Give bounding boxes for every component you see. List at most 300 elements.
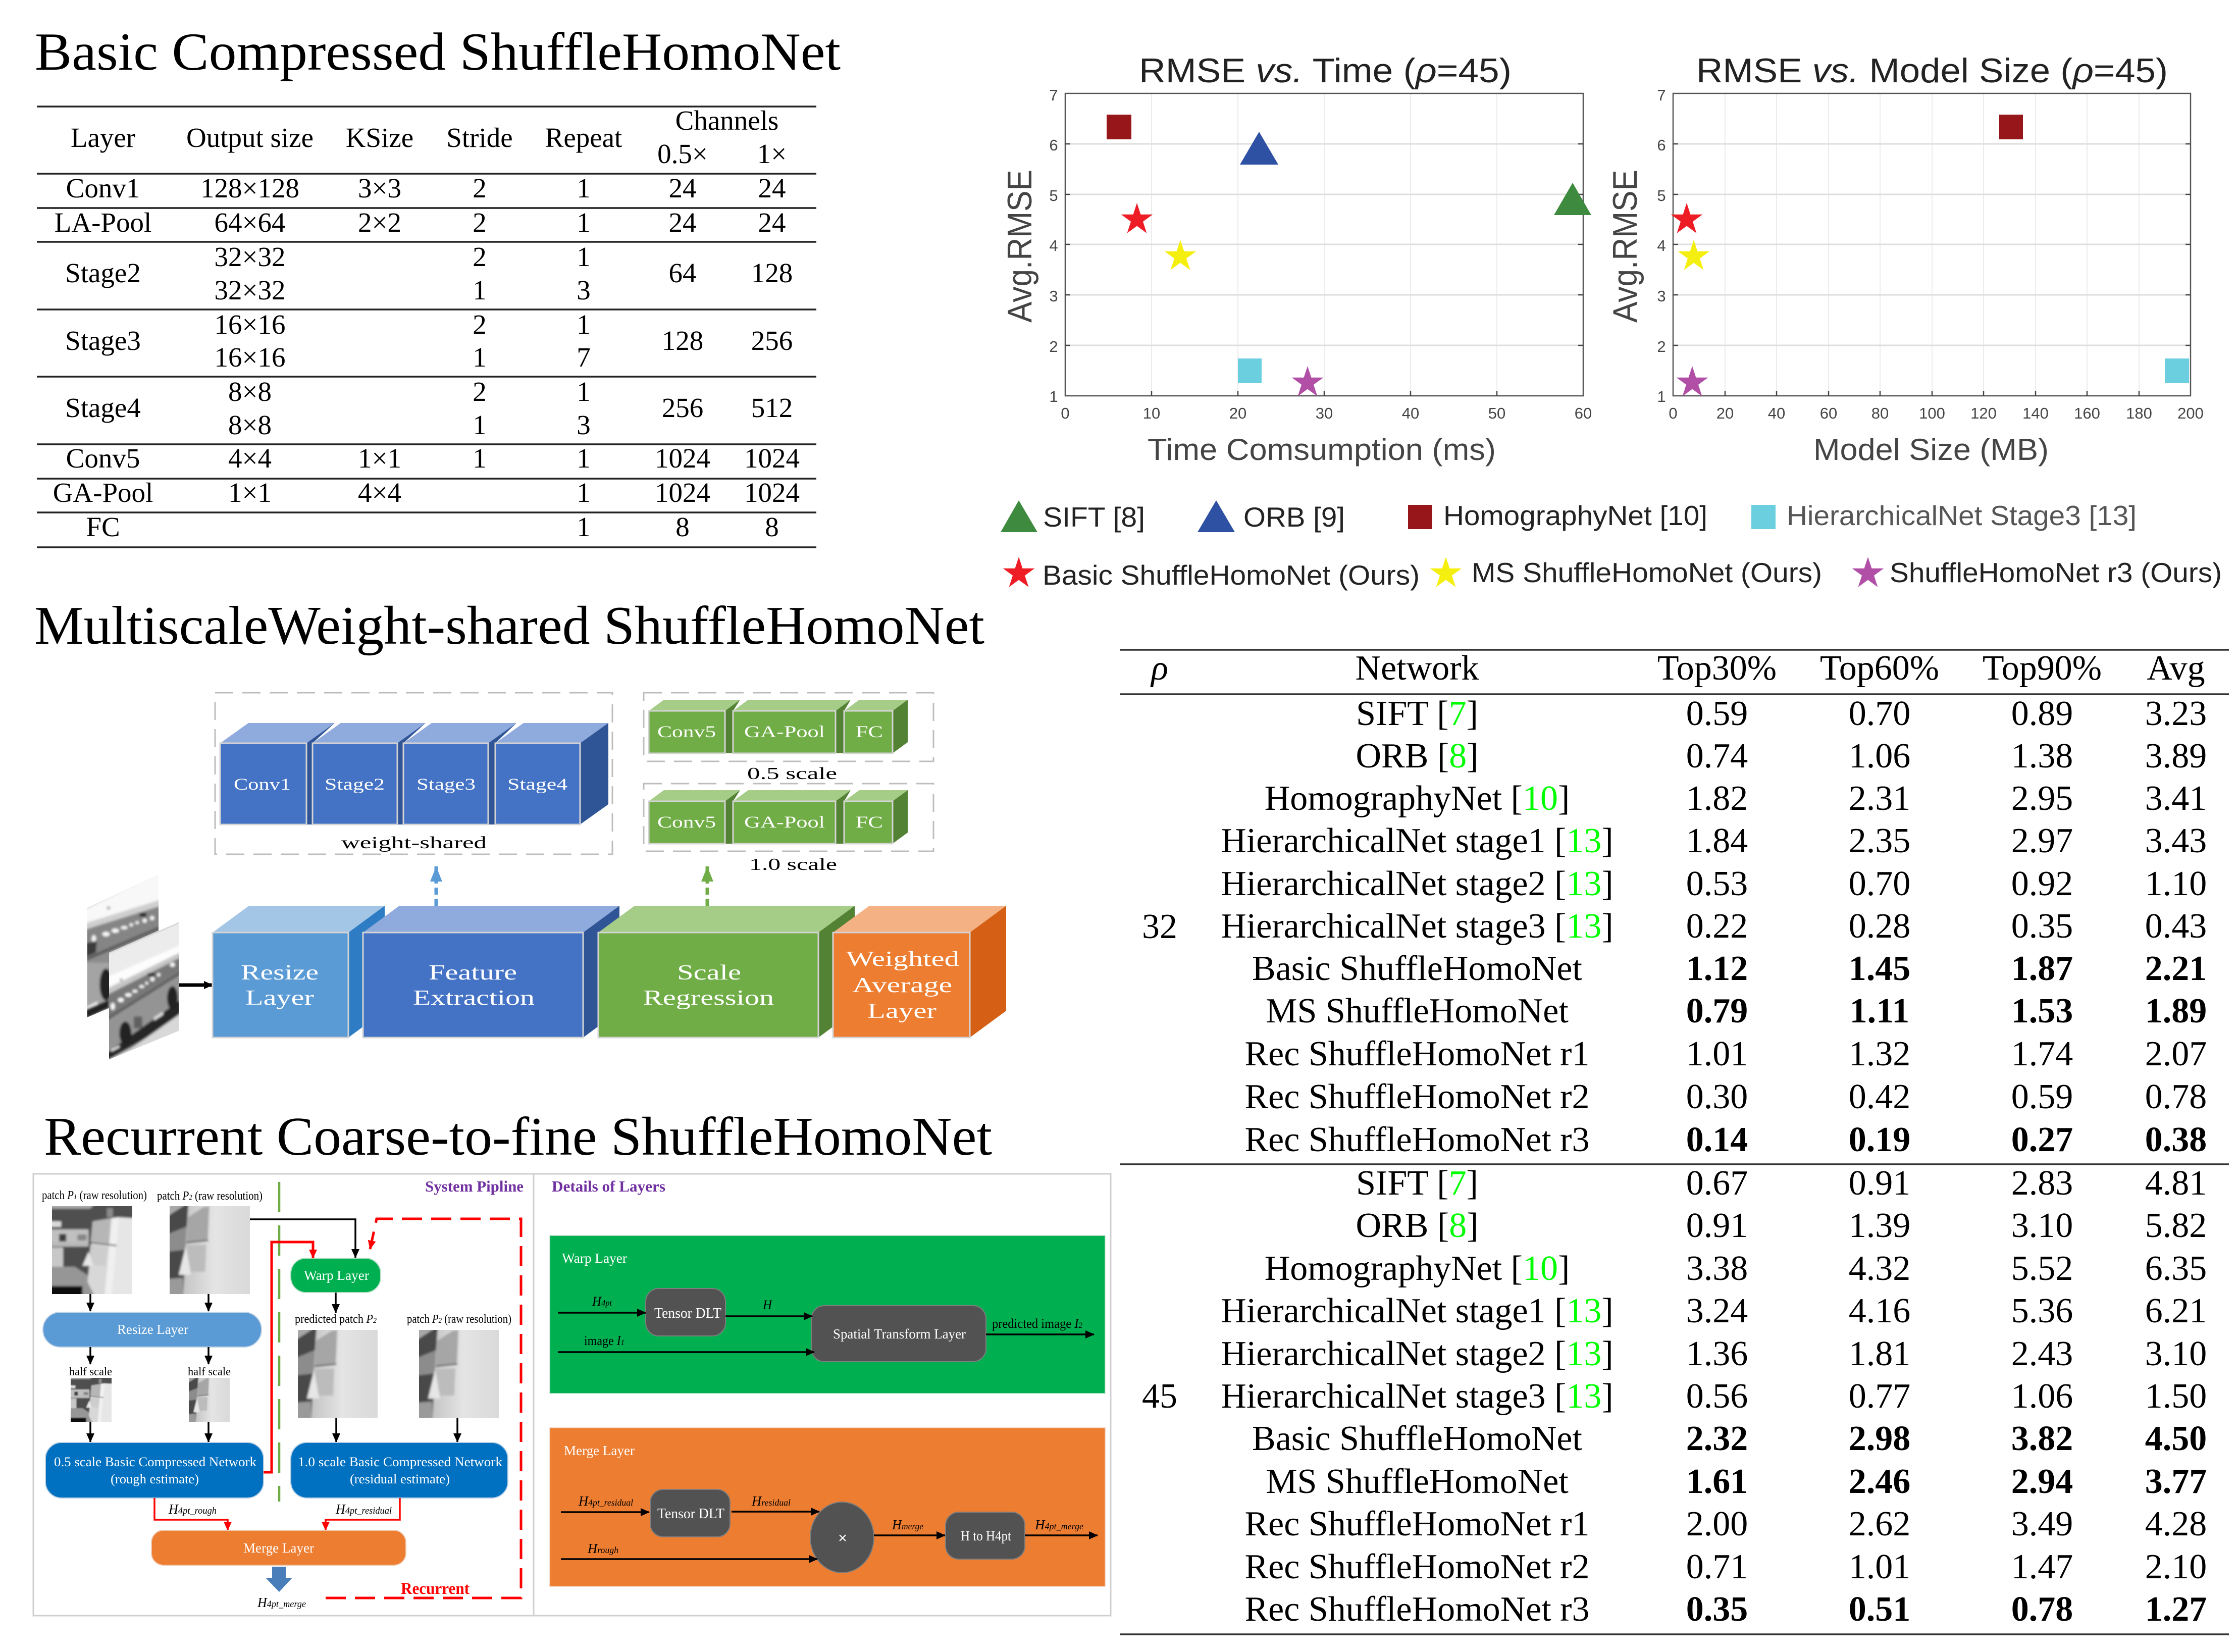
rho group 32 rows: 0.38	[2145, 1120, 2207, 1159]
row: 1.0 scale blocks: Conv5	[657, 813, 716, 832]
rho group 32 rows: HierarchicalNet stage1 [13]	[1221, 821, 1614, 860]
table: basic network layers: Output size	[186, 122, 314, 153]
arrow: blue dashed up	[434, 866, 438, 906]
rho group 45 rows: 2.46	[1849, 1462, 1910, 1501]
rho group 45 rows: 3.10	[2011, 1206, 2073, 1245]
table: basic network layers: 2	[473, 173, 487, 203]
rho group 45 rows: 3.24	[1686, 1292, 1748, 1330]
panel: merge layer detail	[550, 1428, 1105, 1586]
arrow: recurrent loop	[326, 1219, 521, 1598]
x axis ticks: 30	[1316, 404, 1333, 422]
table: basic network layers: 1	[577, 241, 591, 272]
arrows and labels: merge flow	[561, 1493, 1098, 1559]
row: 0.5 scale blocks: Conv5	[657, 723, 716, 741]
block: Conv1	[220, 723, 335, 824]
data markers	[1107, 115, 1591, 396]
arrows and labels: warp flow	[558, 1294, 1094, 1352]
chart title: RMSE vs time: RMSE vs. Time (ρ=45)	[1139, 51, 1512, 90]
y axis ticks: 5	[1657, 187, 1666, 204]
arrow: output down	[266, 1567, 292, 1592]
label: half scale right: half scale	[188, 1365, 231, 1378]
arrows and labels: warp flow: image I1	[584, 1333, 624, 1348]
rho group 32 rows: 3.41	[2145, 779, 2207, 818]
block: tensor DLT: Tensor DLT	[657, 1506, 724, 1522]
panel: weight-shared dashed box	[215, 693, 612, 854]
rho group 45 rows: HierarchicalNet stage3 [13]	[1221, 1377, 1614, 1416]
rho group 45 rows: 3.38	[1686, 1249, 1748, 1288]
rho group 32 rows: 1.45	[1849, 949, 1910, 988]
x axis ticks: 140	[2022, 404, 2049, 422]
table: basic network layers: 2	[473, 207, 487, 238]
rho group 45 rows: 1.61	[1686, 1462, 1748, 1501]
rho group 45 rows: 4.50	[2145, 1419, 2207, 1458]
x axis ticks: 20	[1229, 404, 1246, 422]
y axis ticks: 6	[1657, 136, 1666, 154]
block: Weighted Average Layer: Layer	[867, 1000, 936, 1023]
label: 0.5 scale: 0.5 scale	[747, 764, 837, 783]
rho group 32 rows: 0.59	[2011, 1077, 2073, 1116]
y axis ticks: 2	[1049, 338, 1058, 355]
rho group 32 rows: 3.23	[2145, 694, 2207, 733]
title: multiscale network: MultiscaleWeight-shared ShuffleHomoNet	[34, 596, 984, 656]
table: basic network layers: 1	[473, 275, 487, 305]
y axis ticks: 7	[1657, 86, 1666, 104]
table: basic network layers: 128	[751, 257, 793, 288]
rho group 45 rows: Rec ShuffleHomoNet r3	[1244, 1590, 1590, 1629]
rho group 45 rows: 1.01	[1849, 1547, 1910, 1586]
rho group 32 rows: HierarchicalNet stage2 [13]	[1221, 864, 1614, 903]
rho group 32 rows: 0.43	[2145, 907, 2207, 946]
rho group 32 rows	[1142, 694, 2207, 1159]
rho group 45 rows: 2.32	[1686, 1419, 1748, 1458]
table header: ρ	[1150, 649, 1168, 688]
title: recurrent network: Recurrent Coarse-to-fine ShuffleHomoNet	[44, 1107, 992, 1167]
block: Scale Regression	[598, 906, 855, 1038]
block: Stage2: Stage2	[325, 776, 385, 794]
block: Stage4	[495, 723, 608, 824]
rho group 32 rows: 0.59	[1686, 694, 1748, 733]
x axis ticks: 20	[1716, 404, 1734, 422]
table: basic network layers: 4×4	[358, 477, 401, 508]
label: merge layer: Merge Layer	[564, 1443, 635, 1458]
y axis ticks: 4	[1049, 237, 1058, 254]
legend: SIFT [8]	[1043, 501, 1145, 533]
panel: 0.5 scale dashed box	[644, 693, 933, 761]
table: basic network layers: 3	[577, 409, 591, 440]
rho group 32 rows: 1.82	[1686, 779, 1748, 818]
rho group 45 rows: 4.32	[1849, 1249, 1910, 1288]
table: basic network layers: 16×16	[214, 342, 286, 373]
block: H to H4pt: H to H4pt	[961, 1528, 1011, 1543]
x axis ticks	[1669, 404, 2204, 422]
chart: RMSE vs time	[1001, 51, 1592, 467]
rho group 32 rows: 1.87	[2011, 949, 2073, 988]
rho group 45 rows: 5.82	[2145, 1206, 2207, 1245]
label: recurrent: Recurrent	[401, 1580, 470, 1598]
block: merge layer: Merge Layer	[243, 1540, 314, 1556]
arrow: P2 to warp	[250, 1219, 355, 1258]
rho group 32 rows: 3.89	[2145, 737, 2207, 776]
label: predicted patch: predicted patch P2	[295, 1313, 377, 1326]
block: Stage2	[313, 723, 426, 824]
row: 0.5 scale blocks: FC	[856, 723, 883, 741]
rho group 45 rows: 3.77	[2145, 1462, 2207, 1501]
label: patch P1: patch P1 (raw resolution)	[42, 1189, 147, 1202]
rho group 32 rows: 0.30	[1686, 1077, 1748, 1116]
table: basic network layers: 1	[577, 207, 591, 238]
block: 0.5 scale network	[45, 1442, 264, 1498]
table: basic network layers: 1024	[655, 443, 710, 474]
x axis ticks: 0	[1669, 404, 1678, 422]
x axis ticks: 120	[1970, 404, 1997, 422]
y axis ticks: 6	[1049, 136, 1058, 154]
table: basic network layers: Conv5	[66, 443, 140, 474]
rho group 45 rows: 3.49	[2011, 1505, 2073, 1543]
table: basic network layers: 128	[662, 325, 703, 356]
rho group 32 rows: 1.12	[1686, 949, 1748, 988]
row: 1.0 scale blocks: FC	[856, 813, 883, 832]
rho group 32 rows: Rec ShuffleHomoNet r2	[1244, 1077, 1590, 1116]
rho group 45 rows: 45	[1142, 1377, 1177, 1416]
table: basic network layers: Stride	[446, 122, 513, 153]
rho group 32 rows: 1.89	[2145, 992, 2207, 1030]
rho group 45 rows: 1.39	[1849, 1206, 1910, 1245]
rho group 32 rows: 2.95	[2011, 779, 2073, 818]
table: basic network layers: 24	[668, 207, 697, 238]
block: tensor DLT	[650, 1489, 730, 1537]
arrows and labels: warp flow: H	[762, 1298, 772, 1312]
image: predicted patch	[288, 1320, 389, 1428]
x axis ticks: 100	[1919, 404, 1945, 422]
table: basic network layers: 3	[577, 275, 591, 305]
block: 0.5 scale network: (rough estimate)	[111, 1472, 199, 1486]
rho group 45 rows: 4.16	[1849, 1292, 1910, 1330]
table: basic network layers: 32×32	[214, 241, 286, 272]
block: spatial transform layer	[811, 1306, 986, 1362]
arrows and labels: merge flow: Hrough	[587, 1541, 618, 1556]
table: basic network layers: 24	[758, 173, 786, 203]
label: weight-shared: weight-shared	[341, 834, 487, 852]
table header: Avg	[2147, 649, 2205, 688]
block: multiply circle	[810, 1502, 874, 1573]
rho group 32 rows: 0.19	[1849, 1120, 1910, 1159]
x axis ticks: 0	[1061, 404, 1070, 422]
table: basic network layers: Layer	[71, 122, 135, 153]
data markers	[1671, 115, 2189, 396]
x axis ticks: 40	[1402, 404, 1419, 422]
block: Feature Extraction: Feature	[429, 961, 517, 985]
x axis label: Model Size (MB)	[1813, 433, 2049, 467]
block: warp layer	[291, 1258, 381, 1293]
rho group 45 rows: Rec ShuffleHomoNet r2	[1244, 1547, 1590, 1586]
rho group 32 rows: 3.43	[2145, 821, 2207, 860]
block: warp layer: Warp Layer	[304, 1268, 369, 1283]
block: Resize Layer: Layer	[245, 987, 314, 1010]
x axis ticks: 200	[2177, 404, 2204, 422]
block: merge layer	[151, 1530, 406, 1565]
label: warp layer: Warp Layer	[562, 1251, 627, 1266]
rho group 45 rows: 0.35	[1686, 1590, 1748, 1629]
panel: recurrent network figure	[33, 1174, 1111, 1616]
rho group 32 rows: 1.10	[2145, 864, 2207, 903]
arrow: warp to predicted	[335, 1293, 337, 1313]
rho group 32 rows: HierarchicalNet stage3 [13]	[1221, 907, 1614, 946]
table: basic network layers: 2	[473, 309, 487, 340]
row: 0.5 scale blocks	[649, 700, 908, 753]
rho group 45 rows: 0.51	[1849, 1590, 1910, 1629]
y axis ticks	[1657, 86, 1666, 405]
table header: Top30%	[1657, 649, 1777, 688]
rho group 45 rows: 1.81	[1849, 1334, 1910, 1373]
table: basic network layers: 1	[577, 477, 591, 508]
y axis label: Avg.RMSE	[1001, 170, 1039, 323]
rho group 45 rows: 4.28	[2145, 1505, 2207, 1543]
rho group 45 rows: 2.62	[1849, 1505, 1910, 1543]
y axis label: Avg.RMSE	[1606, 170, 1644, 323]
rho group 45 rows: MS ShuffleHomoNet	[1266, 1462, 1569, 1501]
rho group 45 rows: SIFT [7]	[1356, 1164, 1478, 1203]
table: basic network layers: 1	[473, 443, 487, 474]
table header	[1150, 649, 2205, 688]
image: patch P2	[160, 1196, 261, 1304]
arrow: green dashed up	[706, 866, 709, 906]
rho group 32 rows: 32	[1142, 907, 1177, 946]
block: spatial transform layer: Spatial Transform Layer	[833, 1326, 966, 1341]
block: Resize Layer: Resize	[241, 961, 319, 985]
rho group 32 rows: 0.78	[2145, 1077, 2207, 1116]
rho group 45 rows: Basic ShuffleHomoNet	[1252, 1419, 1582, 1458]
block: Weighted Average Layer: Weighted	[846, 948, 959, 971]
legend: ShuffleHomoNet r3 (Ours)	[1890, 557, 2222, 588]
table: basic network layers: 3×3	[358, 173, 401, 203]
arrows and labels: warp flow: H4pt	[592, 1294, 612, 1309]
table: basic network layers: 1024	[744, 443, 800, 474]
y axis ticks	[1049, 86, 1058, 405]
arrows and labels: merge flow: H4pt_residual	[578, 1493, 633, 1509]
legend: Basic ShuffleHomoNet (Ours)	[1043, 559, 1420, 591]
rho group 45 rows: 4.81	[2145, 1164, 2207, 1203]
rho group 45 rows: 1.50	[2145, 1377, 2207, 1416]
block: Stage3: Stage3	[417, 776, 476, 794]
rho group 32 rows: 0.42	[1849, 1077, 1910, 1116]
table: basic network layers: 7	[577, 342, 591, 373]
table: basic network layers: 1024	[655, 477, 710, 508]
arrows and labels: merge flow: Hresidual	[751, 1493, 791, 1509]
image: patch P1	[42, 1196, 143, 1304]
rho group 32 rows: 0.79	[1686, 992, 1748, 1030]
table: benchmark results	[1120, 649, 2229, 1634]
rho group 45 rows: 3.82	[2011, 1419, 2073, 1458]
y axis ticks: 5	[1049, 187, 1058, 204]
table: basic network layers: 1×1	[358, 443, 401, 474]
rho group 45 rows: HierarchicalNet stage1 [13]	[1221, 1292, 1614, 1330]
rho group 45 rows: 2.94	[2011, 1462, 2073, 1501]
block: Stage3	[403, 723, 516, 824]
block: Scale Regression: Scale	[677, 961, 741, 985]
table: basic network layers: 2	[473, 241, 487, 272]
arrows and labels: merge flow: H4pt_merge	[1034, 1517, 1083, 1532]
label: patch P2: patch P2 (raw resolution)	[157, 1190, 263, 1203]
block: Conv1: Conv1	[234, 776, 291, 794]
legend: MS ShuffleHomoNet (Ours)	[1472, 557, 1822, 588]
table: basic network layers: 1	[577, 173, 591, 203]
block: Weighted Average Layer	[833, 906, 1006, 1038]
rho group 45 rows: 0.56	[1686, 1377, 1748, 1416]
rho group 32 rows: 0.28	[1849, 907, 1910, 946]
table: basic network layers: 2×2	[358, 207, 401, 238]
table: basic network layers: LA-Pool	[55, 207, 151, 238]
table: basic network layers: 256	[751, 325, 793, 356]
rho group 45 rows: 2.43	[2011, 1334, 2073, 1373]
y axis ticks: 2	[1657, 338, 1666, 355]
x axis ticks: 160	[2074, 404, 2100, 422]
rho group 45 rows: 2.98	[1849, 1419, 1910, 1458]
rho group 45 rows	[1142, 1164, 2207, 1629]
block: multiply circle: ×	[838, 1530, 847, 1546]
table: basic network layers: 256	[662, 392, 703, 423]
table: basic network layers: Channels	[675, 105, 778, 136]
arrows: half scale to network	[90, 1422, 209, 1442]
rho group 45 rows: 0.78	[2011, 1590, 2073, 1629]
label: patch P2 raw: patch P2 (raw resolution)	[407, 1313, 511, 1326]
y axis ticks: 1	[1049, 388, 1058, 405]
y axis ticks: 3	[1657, 287, 1666, 305]
title: basic network: Basic Compressed ShuffleHomoNet	[35, 22, 841, 81]
arrow: residual to merge	[326, 1498, 400, 1530]
legend: HierarchicalNet Stage3 [13]	[1787, 500, 2137, 531]
table: basic network layers: 64	[668, 257, 697, 288]
block: Feature Extraction: Extraction	[413, 987, 535, 1010]
legend	[1001, 500, 2222, 591]
table: basic network layers: 1	[577, 309, 591, 340]
image: patch P2 repeated	[409, 1320, 510, 1428]
image: half scale P2	[184, 1373, 235, 1427]
rho group 32 rows: 2.35	[1849, 821, 1910, 860]
block: Stage4: Stage4	[507, 776, 567, 794]
block: 1.0 scale network	[291, 1442, 508, 1498]
rho group 32 rows: 1.74	[2011, 1035, 2073, 1073]
table: basic network layers: 0.5×	[657, 138, 708, 169]
rho group 45 rows: 1.27	[2145, 1590, 2207, 1629]
rho group 32 rows: 0.89	[2011, 694, 2073, 733]
arrows: resize to half scale	[90, 1347, 209, 1364]
rho group 32 rows: 2.31	[1849, 779, 1910, 818]
rho group 45 rows: 1.36	[1686, 1334, 1748, 1373]
rho group 32 rows: 2.07	[2145, 1035, 2207, 1073]
panel: 1.0 scale dashed box	[644, 784, 933, 851]
rho group 32 rows: 0.27	[2011, 1120, 2073, 1159]
rho group 32 rows: Rec ShuffleHomoNet r3	[1244, 1120, 1590, 1159]
rho group 32 rows: MS ShuffleHomoNet	[1266, 992, 1569, 1030]
heading: details of layers: Details of Layers	[552, 1177, 665, 1195]
x axis label: Time Comsumption (ms)	[1148, 433, 1496, 467]
rho group 45 rows: 0.91	[1686, 1206, 1748, 1245]
label: half scale left: half scale	[69, 1365, 112, 1378]
rho group 45 rows: 3.10	[2145, 1334, 2207, 1373]
block: Scale Regression: Regression	[643, 987, 774, 1010]
table: basic network layers: 24	[758, 207, 786, 238]
table: basic network layers	[37, 105, 816, 547]
rho group 45 rows: 6.21	[2145, 1292, 2207, 1330]
rho group 45 rows: HierarchicalNet stage2 [13]	[1221, 1334, 1614, 1373]
x axis ticks: 60	[1575, 404, 1592, 422]
block: tensor DLT	[646, 1288, 725, 1336]
block: Feature Extraction	[363, 906, 619, 1038]
rho group 45 rows: 0.67	[1686, 1164, 1748, 1203]
arrows: patches to resize	[90, 1294, 209, 1311]
block: 1.0 scale network: (residual estimate)	[350, 1472, 450, 1486]
block: resize layer pill	[43, 1312, 262, 1347]
table: basic network layers: 1	[577, 511, 591, 542]
table: basic network layers: 512	[751, 392, 793, 423]
rho group 32 rows: 1.11	[1850, 992, 1909, 1030]
table: basic network layers: 24	[668, 173, 697, 203]
legend: ORB [9]	[1243, 501, 1345, 533]
rho group 32 rows: SIFT [7]	[1356, 694, 1478, 733]
x axis ticks: 50	[1488, 404, 1505, 422]
table: basic network layers: 1	[577, 376, 591, 407]
label: H4pt merge: H4pt_merge	[257, 1595, 306, 1610]
table: basic network layers: 64×64	[214, 207, 286, 238]
rho group 32 rows: 1.06	[1849, 737, 1910, 776]
rho group 32 rows: 1.53	[2011, 992, 2073, 1030]
rho group 45 rows: HomographyNet [10]	[1265, 1249, 1570, 1288]
table: basic network layers: 2	[473, 376, 487, 407]
y axis ticks: 3	[1049, 287, 1058, 305]
x axis ticks: 80	[1871, 404, 1889, 422]
rho group 32 rows: Basic ShuffleHomoNet	[1252, 949, 1582, 988]
table: basic network layers: 32×32	[214, 275, 286, 305]
rho group 45 rows: 2.10	[2145, 1547, 2207, 1586]
legend: HomographyNet [10]	[1443, 500, 1707, 531]
row: 0.5 scale blocks: GA-Pool	[744, 723, 825, 741]
table header: Network	[1356, 649, 1479, 688]
table: basic network layers: 8	[765, 511, 779, 542]
rho group 32 rows: 0.53	[1686, 864, 1748, 903]
table: basic network layers: 8	[675, 511, 690, 542]
x axis ticks: 10	[1143, 404, 1160, 422]
block: 0.5 scale network: 0.5 scale Basic Compressed Network	[54, 1455, 256, 1469]
rho group 45 rows: Rec ShuffleHomoNet r1	[1244, 1505, 1590, 1543]
rho group 45 rows: 1.47	[2011, 1547, 2073, 1586]
arrow: input to resize	[179, 984, 213, 987]
chart: RMSE vs model size	[1606, 51, 2204, 467]
table: basic network layers: 8×8	[228, 409, 272, 440]
label: H4pt residual: H4pt_residual	[335, 1502, 392, 1517]
rho group 45 rows: 6.35	[2145, 1249, 2207, 1288]
arrow: rough estimate to warp	[264, 1242, 313, 1472]
table: basic network layers: Conv1	[66, 173, 140, 203]
rho group 32 rows: 0.74	[1686, 737, 1748, 776]
rho group 32 rows: HomographyNet [10]	[1265, 779, 1570, 818]
heading: system pipeline: System Pipline	[425, 1177, 524, 1195]
row: 1.0 scale blocks	[649, 790, 908, 844]
table: basic network layers: 1024	[744, 477, 800, 508]
rho group 32 rows: 2.97	[2011, 821, 2073, 860]
chart title: RMSE vs model size: RMSE vs. Model Size ( ρ=45)	[1696, 51, 2168, 90]
rho group 32 rows: 2.21	[2145, 949, 2207, 988]
table: basic network layers: 1×	[757, 138, 787, 169]
row: 1.0 scale blocks: GA-Pool	[744, 813, 825, 832]
table: basic network layers: 1×1	[228, 477, 272, 508]
table header: Top60%	[1820, 649, 1939, 688]
rho group 45 rows: 0.91	[1849, 1164, 1910, 1203]
label: 1.0 scale: 1.0 scale	[749, 855, 837, 874]
block: H to H4pt	[946, 1512, 1025, 1559]
rho group 32 rows: 1.38	[2011, 737, 2073, 776]
table: basic network layers: Repeat	[545, 122, 622, 153]
y axis ticks: 7	[1049, 86, 1058, 104]
